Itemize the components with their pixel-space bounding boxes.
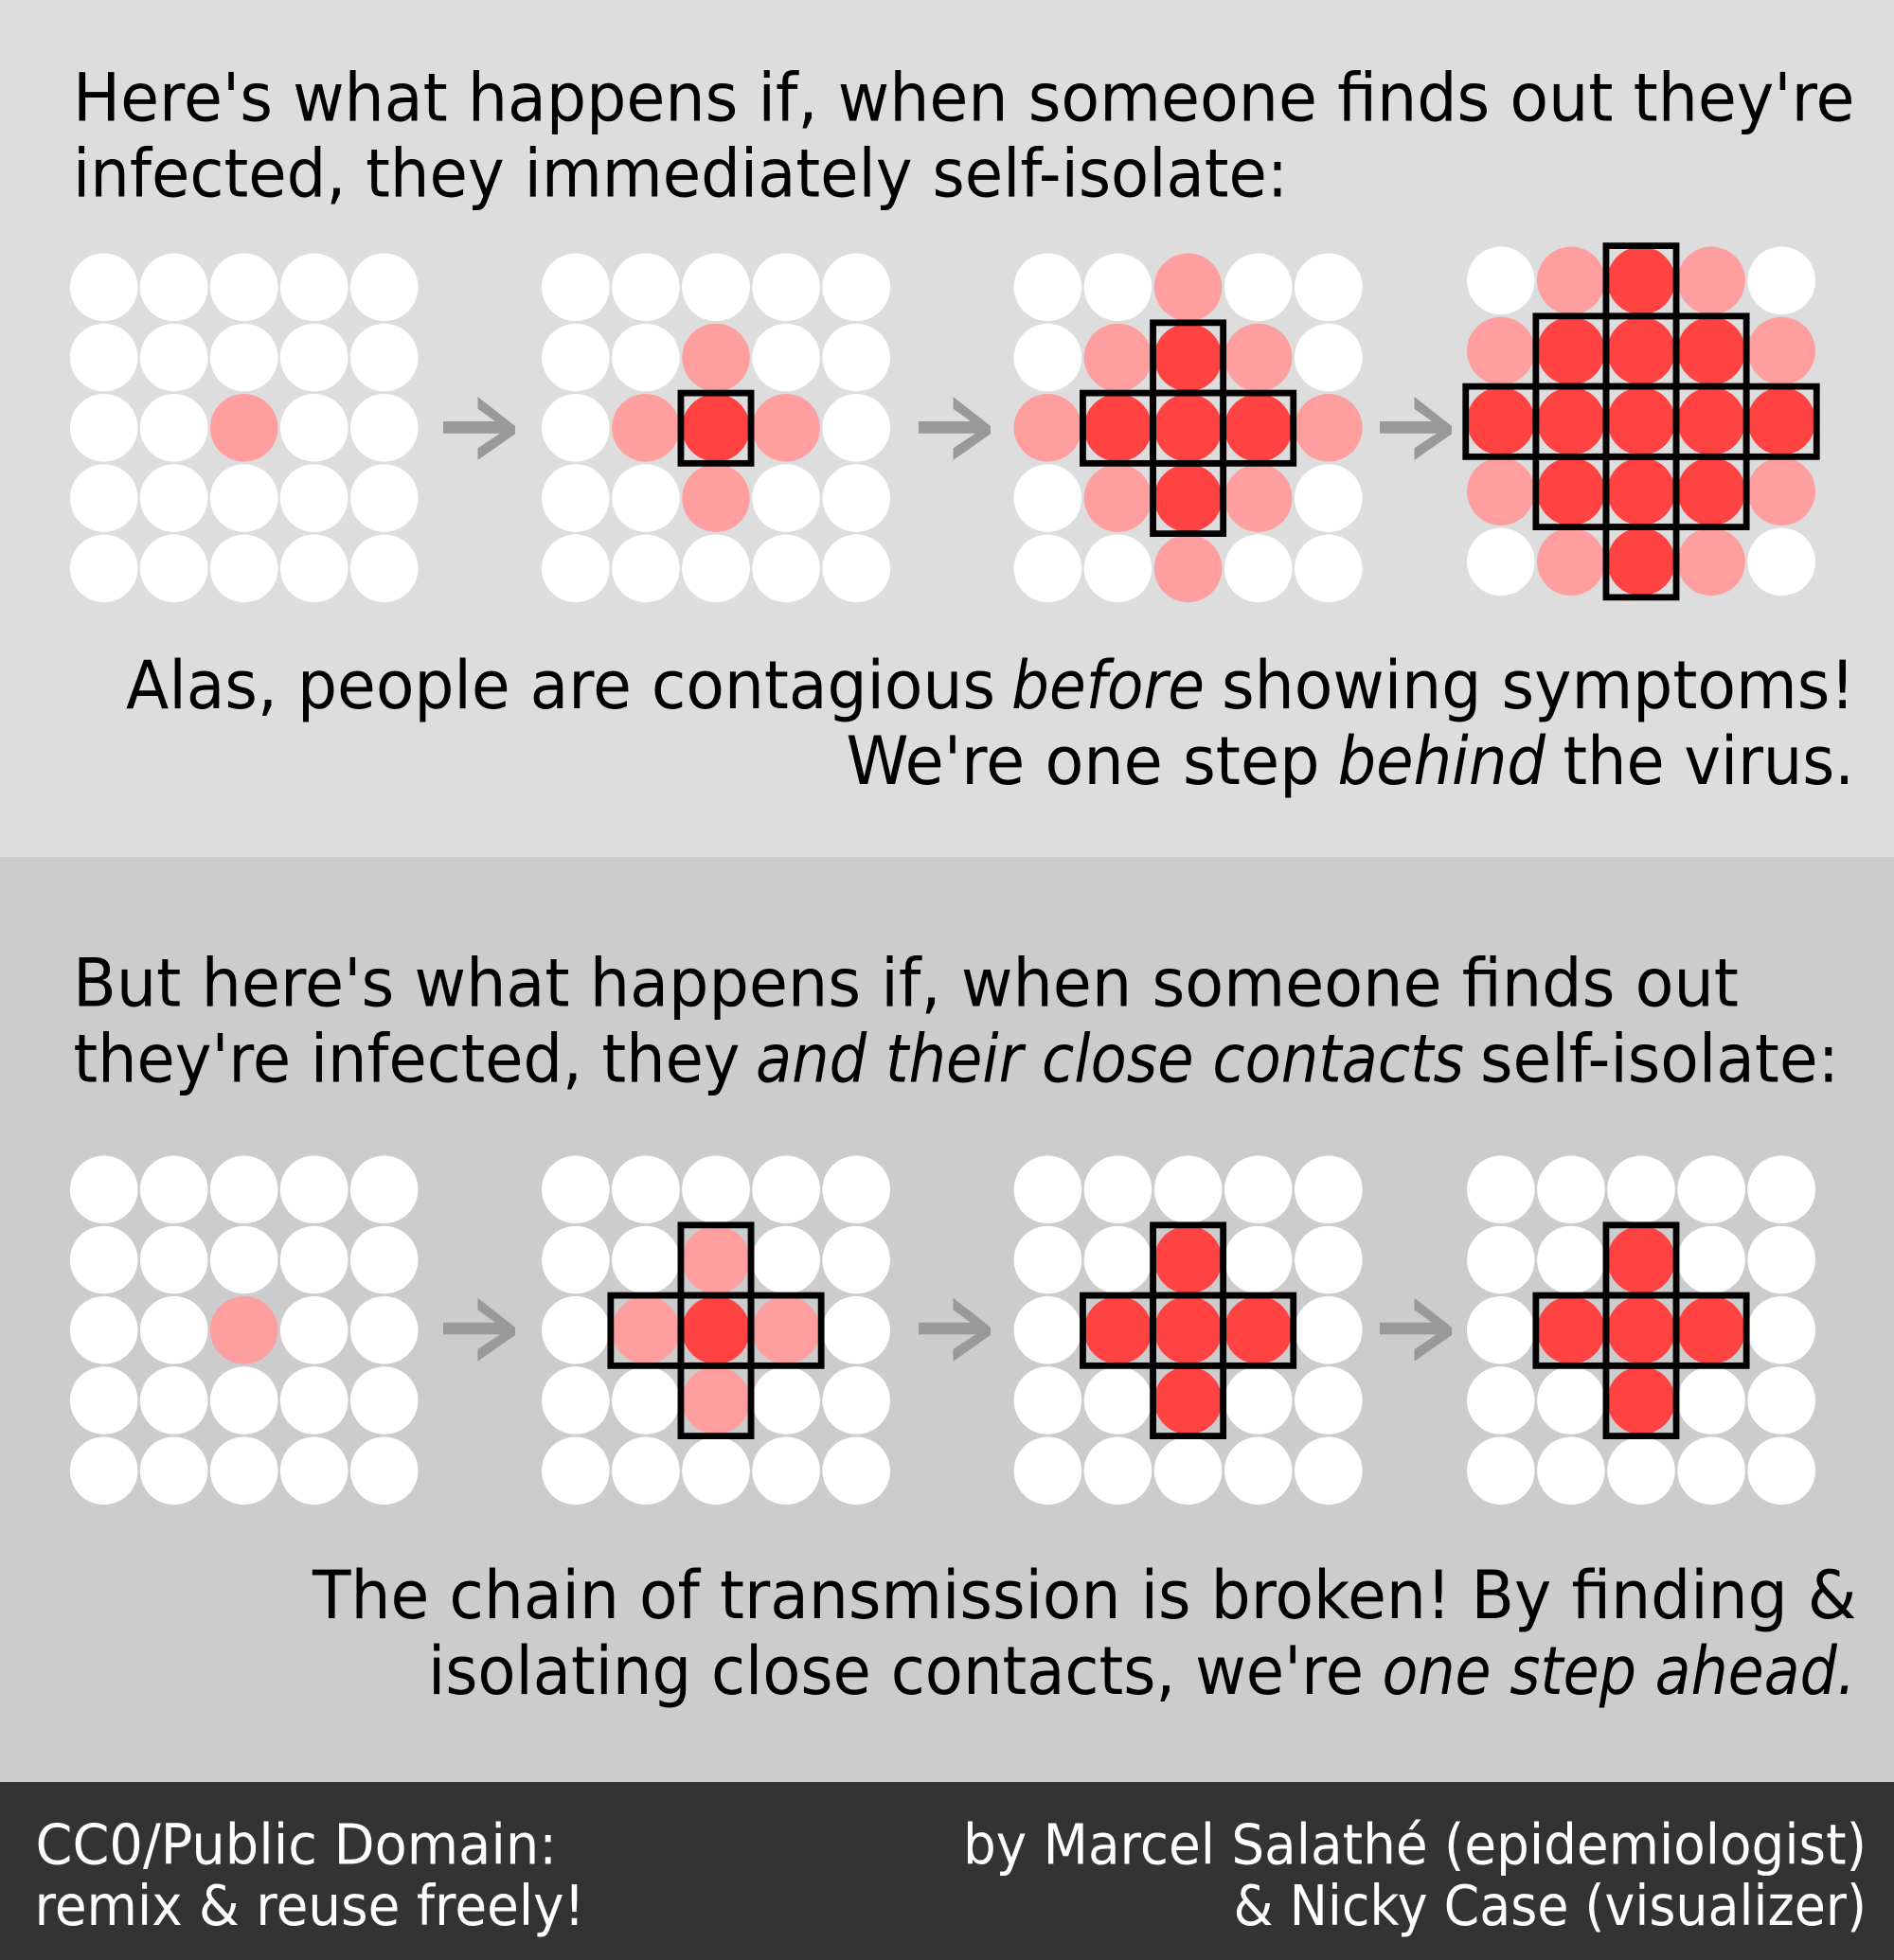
grid: step 4, infection still spreading bbox=[1466, 246, 1816, 597]
arrow: step 2 to 3 bbox=[919, 1298, 991, 1362]
grid: step 2, first case isolated bbox=[542, 254, 890, 602]
text: one step ahead conclusion bbox=[312, 1557, 1857, 1710]
footer: credits bbox=[963, 1812, 1867, 1938]
arrow: step 1 to 2 bbox=[443, 397, 515, 460]
heading: self-isolate scenario: Here's what happens if, when someone finds out they're bbox=[73, 59, 1854, 136]
footer: license note bbox=[34, 1812, 585, 1938]
footer bbox=[0, 1782, 1894, 1960]
panel: self-isolation plus close contacts bbox=[0, 857, 1894, 1782]
arrow: step 3 to 4 bbox=[1380, 397, 1452, 460]
grid: step 1, one infected person bbox=[70, 254, 419, 602]
panel: self-isolation only bbox=[0, 0, 1894, 857]
text: one step behind conclusion: the virus. bbox=[1563, 722, 1854, 800]
grid: step 1, one infected person bbox=[70, 1155, 419, 1505]
arrow: step 2 to 3 bbox=[919, 397, 991, 460]
grid: step 3, infection spreads past isolated cases bbox=[1014, 254, 1363, 602]
heading: self-isolate scenario bbox=[73, 59, 1854, 212]
grid: step 4, chain stays broken bbox=[1467, 1155, 1815, 1505]
text: one step behind conclusion: We're one step bbox=[847, 722, 1320, 800]
text: one step behind conclusion bbox=[126, 647, 1855, 800]
grid: step 2, case and contacts isolated bbox=[542, 1155, 890, 1505]
heading: close contacts scenario: But here's what happens if, when someone finds out bbox=[73, 944, 1739, 1022]
heading: close contacts scenario: self-isolate: bbox=[1480, 1020, 1839, 1097]
footer: license note: remix & reuse freely! bbox=[34, 1873, 585, 1938]
arrow: step 3 to 4 bbox=[1380, 1298, 1452, 1362]
text: one step behind conclusion: behind bbox=[1337, 722, 1546, 800]
grid: step 3, contained cluster bbox=[1014, 1155, 1363, 1505]
heading: self-isolate scenario: infected, they immediately self-isolate: bbox=[73, 134, 1288, 212]
arrow: step 1 to 2 bbox=[443, 1298, 515, 1362]
text: one step behind conclusion: Alas, people are contagious bbox=[126, 647, 995, 724]
heading: close contacts scenario: and their close contacts bbox=[756, 1020, 1464, 1097]
heading: close contacts scenario bbox=[73, 944, 1839, 1097]
footer: license note: CC0/Public Domain: bbox=[36, 1812, 557, 1878]
heading: close contacts scenario: they're infected, they bbox=[74, 1020, 741, 1097]
text: one step ahead conclusion: isolating close contacts, we're bbox=[428, 1632, 1364, 1710]
text: one step behind conclusion: showing symptoms! bbox=[1222, 647, 1855, 724]
text: one step behind conclusion: before bbox=[1011, 647, 1205, 724]
text: one step ahead conclusion: The chain of transmission is broken! By finding & bbox=[312, 1557, 1857, 1634]
